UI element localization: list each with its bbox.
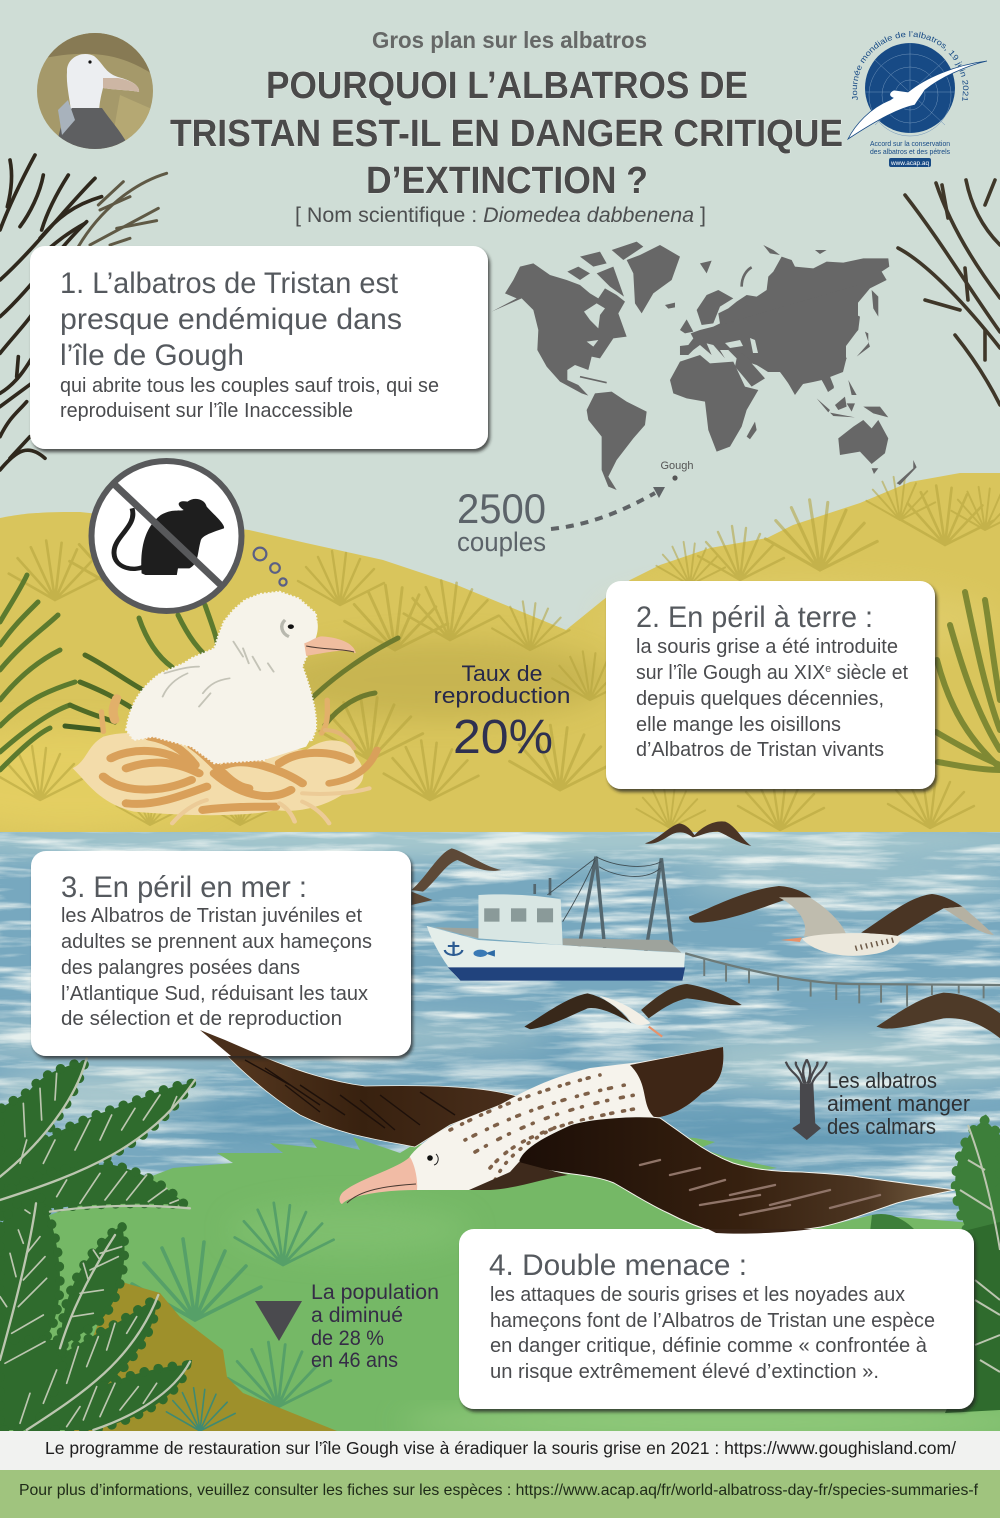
card 1 body: qui abrite tous les couples sauf trois, qui se [60, 375, 439, 397]
back speckles [450, 1075, 640, 1180]
small bird: top [645, 821, 751, 846]
near wing [519, 1117, 955, 1234]
statistic: breeding rate [434, 661, 570, 764]
fishing boat with longline [427, 857, 1000, 1007]
eye [282, 620, 289, 637]
hull [427, 926, 685, 980]
text: squid diet: aiment manger [827, 1091, 970, 1116]
grass tufts on the hills [0, 477, 1000, 830]
beak [340, 1157, 417, 1204]
panel: yellow hills [0, 473, 1000, 832]
longline [685, 953, 1000, 1007]
inland seas [725, 338, 758, 353]
card 2 body: sur l’île Gough au XIX [636, 662, 831, 684]
card 2 body: elle mange les oisillons [636, 714, 841, 736]
logo caption [870, 139, 950, 156]
text: population decline: La population [311, 1280, 439, 1304]
statistic: 2500 couples: 2500 [457, 485, 546, 532]
central and southern Asia landmass [720, 285, 858, 394]
card 4 body: hameçons font de l’Albatros de Tristan une espèce [490, 1310, 935, 1332]
card 4: double threat [459, 1229, 974, 1409]
cabin [478, 894, 563, 945]
card 4 body: en danger critique, définie comme « confrontée à [490, 1335, 928, 1357]
logo url pill: www.acap.aq [890, 160, 929, 167]
card 3 body: les Albatros de Tristan juvéniles et [61, 905, 362, 927]
photo: albatross portrait [36, 32, 154, 155]
card 2 body: siècle et [831, 662, 908, 684]
beak [304, 636, 356, 656]
eye [427, 1155, 433, 1161]
card 4 body: les attaques de souris grises et les noyades aux [490, 1284, 905, 1306]
far wing [205, 1033, 520, 1147]
footer: more information: Pour plus d’informations, veuillez consulter les fiches sur les espèces : https://www.acap.aq/fr/world-albatross-day-fr/species-summaries-f [19, 1482, 979, 1499]
title [170, 65, 843, 202]
belly [469, 1162, 568, 1190]
sky background [0, 0, 1000, 832]
title: D’EXTINCTION ? [366, 160, 648, 202]
card 2 body: e [825, 663, 831, 675]
plants: branches top left [0, 155, 167, 470]
plants: right leaves [870, 1120, 1000, 1413]
logo caption: Accord sur la conservation [870, 139, 950, 148]
text: squid diet [827, 1068, 970, 1139]
footer: restoration programme [0, 1431, 1000, 1470]
card 4 body: un risque extrêmement élevé d’extinction ». [490, 1361, 879, 1383]
statistic: 2500 couples [457, 485, 546, 557]
footer: restoration programme: Le programme de restauration sur l’île Gough vise à éradiquer la souris grise en 2021 : https://www.goughisland.com/ [45, 1438, 956, 1458]
text: population decline: en 46 ans [311, 1348, 398, 1372]
olive mound [73, 1282, 337, 1431]
dashed arrow to Gough [551, 487, 665, 529]
fronds: left of chick [0, 575, 398, 770]
statistic: breeding rate: 20% [453, 711, 553, 764]
title: POURQUOI L’ALBATROS DE [266, 65, 748, 107]
logo ring text: Journée mondiale de l’albatros, 19 juin 2021 [852, 31, 968, 101]
dark wingtip [630, 1047, 723, 1118]
text: squid diet: des calmars [827, 1114, 936, 1139]
card 2 body [636, 636, 908, 761]
statistic: 2500 couples: couples [457, 527, 546, 557]
logo caption: des albatros et des pétrels [870, 147, 950, 156]
plants: foreground leaves [0, 1058, 195, 1430]
card 1: endemic [30, 246, 488, 449]
flying bird: right, grey wings [689, 886, 994, 956]
far wing tip overlapping card 3 [200, 1030, 262, 1056]
panel: green island [0, 1130, 1000, 1432]
card 1 heading: 1. L’albatros de Tristan est [60, 267, 399, 300]
title: TRISTAN EST-IL EN DANGER CRITIQUE [170, 113, 843, 155]
plants: branches top right [898, 180, 1000, 405]
card 1 heading: l’île de Gough [60, 339, 244, 372]
footer: more information [0, 1470, 1000, 1518]
card 2 body: depuis quelques décennies, [636, 688, 884, 710]
main albatross in flight [205, 1033, 955, 1234]
icon: no mouse sign [92, 461, 242, 611]
card 3: at sea [31, 851, 411, 1056]
masts and rigging [535, 857, 672, 952]
kicker heading: Gros plan sur les albatros [372, 27, 647, 53]
small bird: left, behind card 3 [411, 848, 501, 905]
icon: squid [786, 1059, 827, 1140]
card 4 heading: 4. Double menace : [489, 1249, 747, 1282]
white back and head [408, 1047, 723, 1190]
card 3 body [61, 905, 372, 1030]
feather detail [640, 1160, 880, 1215]
text: population decline: de 28 % [311, 1326, 384, 1350]
panel: sea [0, 822, 1000, 1232]
logo: World Albatross Day [847, 31, 988, 167]
card 1 heading [60, 267, 402, 372]
card 1 body: reproduisent sur l’île Inaccessible [60, 400, 353, 422]
text: population decline: a diminué [311, 1303, 403, 1327]
card 1 body [60, 375, 439, 422]
statistic: breeding rate: Taux de [462, 661, 542, 686]
flying bird: centre [524, 984, 742, 1037]
fronds: right side [936, 592, 1000, 770]
map label: Gough: Gough [660, 460, 694, 472]
card 2: on land [606, 581, 935, 789]
near wing tip overlapping card 4 [708, 1229, 812, 1234]
chick [126, 592, 356, 763]
scientific name: [ Nom scientifique : Diomedea dabbenena ] [295, 204, 706, 227]
card 2 body: la souris grise a été introduite [636, 636, 898, 658]
grass tufts on the island [132, 1203, 334, 1407]
card 3 body: adultes se prennent aux hameçons [61, 931, 372, 953]
card 1 heading: presque endémique dans [60, 303, 402, 336]
nest [73, 698, 377, 823]
text: population decline [311, 1280, 439, 1372]
logo bird [848, 61, 987, 139]
anchor and fish marks [445, 942, 495, 957]
card 2 body: d’Albatros de Tristan vivants [636, 739, 884, 761]
card 3 heading: 3. En péril en mer : [61, 871, 307, 904]
card 3 body: des palangres posées dans [61, 957, 300, 979]
card 3 body: de sélection et de reproduction [61, 1008, 342, 1030]
card 3 body: l’Atlantique Sud, réduisant les taux [61, 983, 368, 1005]
text: squid diet: Les albatros [827, 1068, 937, 1093]
thought bubbles [254, 548, 287, 586]
card 4 body [490, 1284, 935, 1383]
statistic: breeding rate: reproduction [434, 683, 570, 708]
card 2 heading: 2. En péril à terre : [636, 601, 873, 634]
world map [492, 242, 917, 490]
flying bird: right edge [876, 993, 1000, 1038]
mouse silhouette [114, 499, 224, 575]
icon: population decline triangle [255, 1301, 302, 1341]
